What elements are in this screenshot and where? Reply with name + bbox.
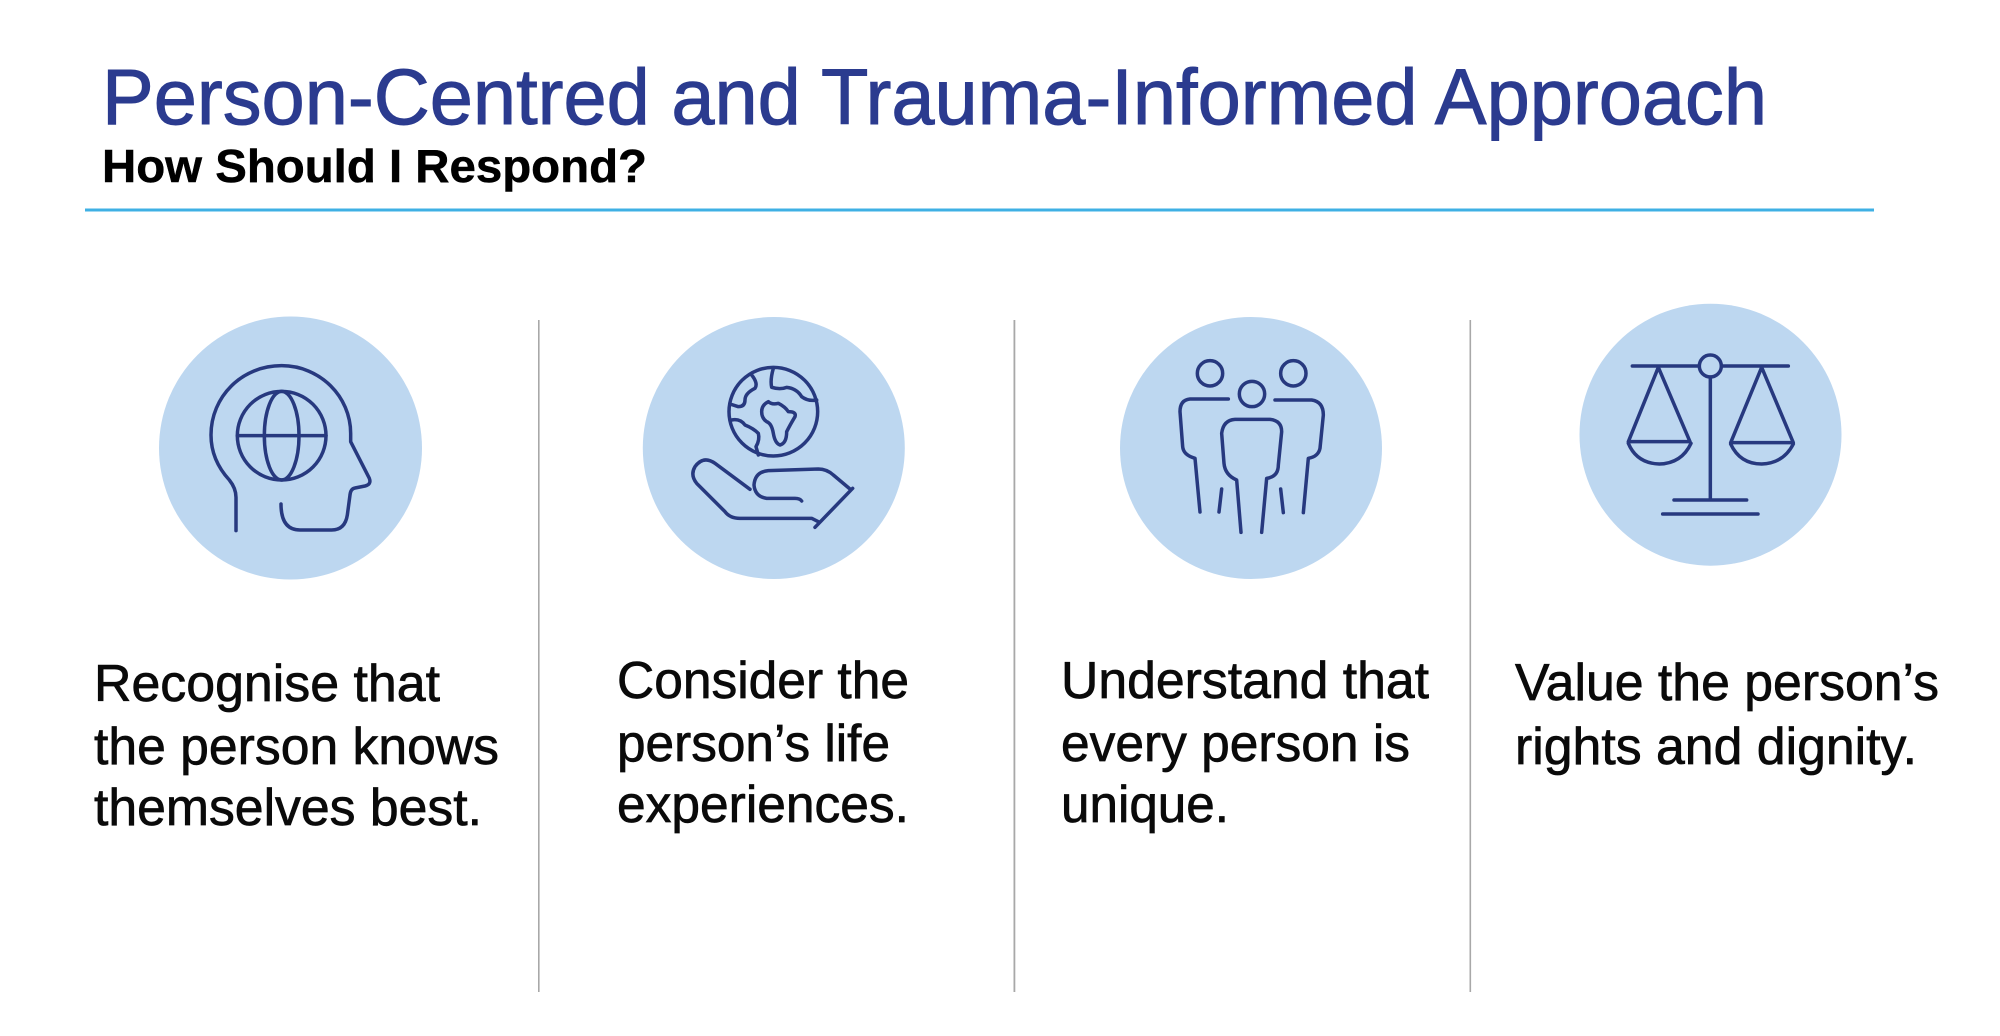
icon circle: people background <box>1120 317 1382 579</box>
subtitle: How Should I Respond? <box>102 140 647 192</box>
icon circle: globe background <box>643 317 905 579</box>
text: unique <box>1061 652 1430 834</box>
panel: unique <box>1061 317 1430 834</box>
text: rights and dignity <box>1515 654 1939 776</box>
title: Person-Centred and Trauma-Informed Approach <box>102 52 1767 141</box>
text: rights and dignity: Value the person’s <box>1515 654 1939 712</box>
icon: group of people <box>1180 361 1323 532</box>
text: recognise: Recognise that <box>94 655 441 713</box>
text: life experiences: Consider the <box>617 652 909 710</box>
text: unique: Understand that <box>1061 652 1430 710</box>
icon: balance scales <box>1628 355 1793 514</box>
text: recognise <box>94 655 499 837</box>
icon: head with globe <box>211 366 370 531</box>
text: life experiences: person’s life <box>617 715 890 773</box>
text: recognise: themselves best. <box>94 779 482 837</box>
panel: recognise <box>94 316 499 837</box>
icon: hand holding globe <box>693 367 853 527</box>
text: life experiences: experiences. <box>617 776 909 834</box>
panel: life experiences <box>617 317 909 834</box>
text: recognise: the person knows <box>94 718 499 776</box>
text: unique: every person is <box>1061 715 1410 773</box>
icon circle: scales background <box>1580 304 1842 566</box>
text: rights and dignity: rights and dignity. <box>1515 718 1917 776</box>
text: life experiences <box>617 652 909 834</box>
text: unique: unique. <box>1061 776 1229 834</box>
panel: rights and dignity <box>1515 304 1939 776</box>
icon circle: head background <box>159 316 422 580</box>
